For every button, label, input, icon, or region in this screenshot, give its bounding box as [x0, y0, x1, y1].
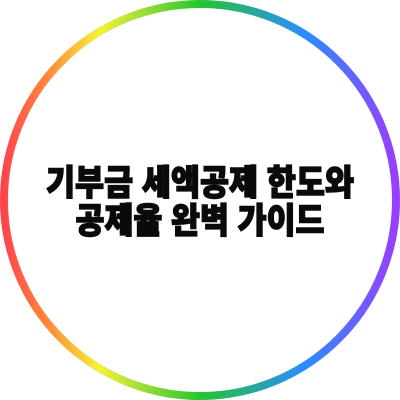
title line 1: 기부금 세액공제 한도와: [46, 164, 354, 203]
title: [46, 164, 354, 241]
title line 2: 공제율 완벽 가이드: [76, 202, 324, 241]
